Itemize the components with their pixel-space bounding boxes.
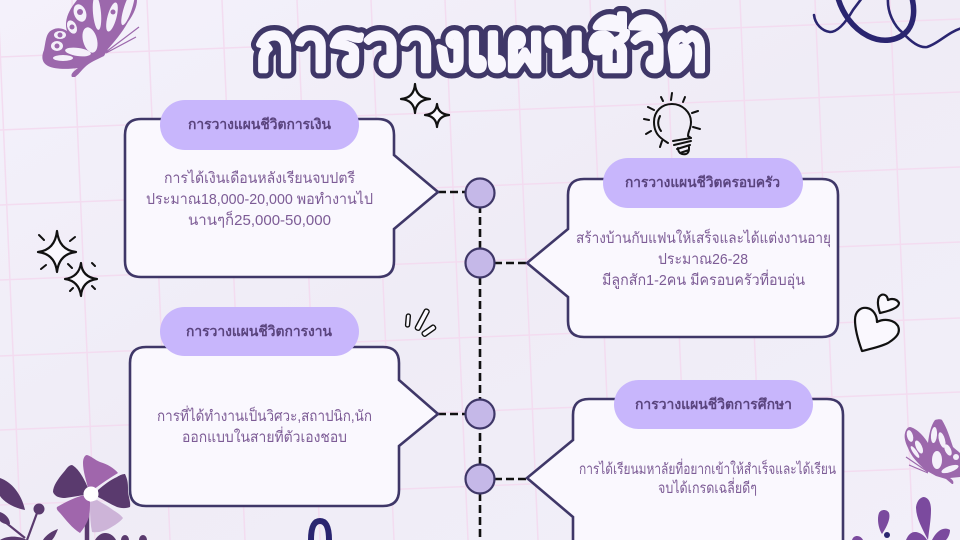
panel: career: การที่ได้ทำงานเป็นวิศวะ,สถาปนิก,นัก xyxy=(157,405,372,425)
icon: leaves bottom right xyxy=(852,497,950,540)
panel: career: ออกแบบในสายที่ตัวเองชอบ xyxy=(182,426,347,446)
icon: sparkles left xyxy=(38,231,97,296)
title: การวางแผนชีวิต xyxy=(255,10,707,84)
icon: navy swirl top right xyxy=(814,0,960,47)
panel: finance: ประมาณ18,000-20,000 พอทำงานไป xyxy=(146,190,373,208)
panel: family xyxy=(527,158,838,337)
panel: family: มีลูกสัก1-2คน มีครอบครัวที่อบอุ่น xyxy=(602,269,805,290)
icon: emphasis strokes xyxy=(405,308,436,337)
panel: finance: การได้เงินเดือนหลังเรียนจบปตรี xyxy=(164,169,355,187)
panel: education: จบได้เกรดเฉลี่ยดีๆ xyxy=(658,477,757,497)
timeline nodes xyxy=(466,178,494,494)
panel: finance: นานๆก็25,000-50,000 xyxy=(188,210,331,229)
icon: navy loop bottom centre xyxy=(311,521,329,540)
panel: finance: การวางแผนชีวิตการเงิน xyxy=(188,116,331,132)
panel: education: การได้เรียนมหาลัยที่อยากเข้าให้สำเร็จและได้เรียน xyxy=(579,458,836,478)
panel: career xyxy=(130,307,438,506)
icon: light bulb xyxy=(644,93,700,154)
icon: butterfly top left xyxy=(42,0,139,77)
panel: finance xyxy=(125,100,438,277)
icon: butterfly bottom right xyxy=(905,419,960,484)
panel: education xyxy=(527,380,843,540)
icon: sparkles top centre xyxy=(401,84,449,127)
icon: hearts xyxy=(855,295,899,351)
panel: career: การวางแผนชีวิตการงาน xyxy=(186,323,332,339)
icon: flower and leaves bottom left xyxy=(0,455,147,540)
panel: education: การวางแผนชีวิตการศึกษา xyxy=(635,396,792,412)
panel: family: ประมาณ26-28 xyxy=(658,251,748,268)
panel: family: การวางแผนชีวิตครอบครัว xyxy=(625,174,780,190)
title: การวางแผนชีวิต xyxy=(255,10,707,84)
panel: family: สร้างบ้านกับแฟนให้เสร็จและได้แต่งงานอายุ xyxy=(576,228,831,248)
timeline connector xyxy=(438,178,527,540)
